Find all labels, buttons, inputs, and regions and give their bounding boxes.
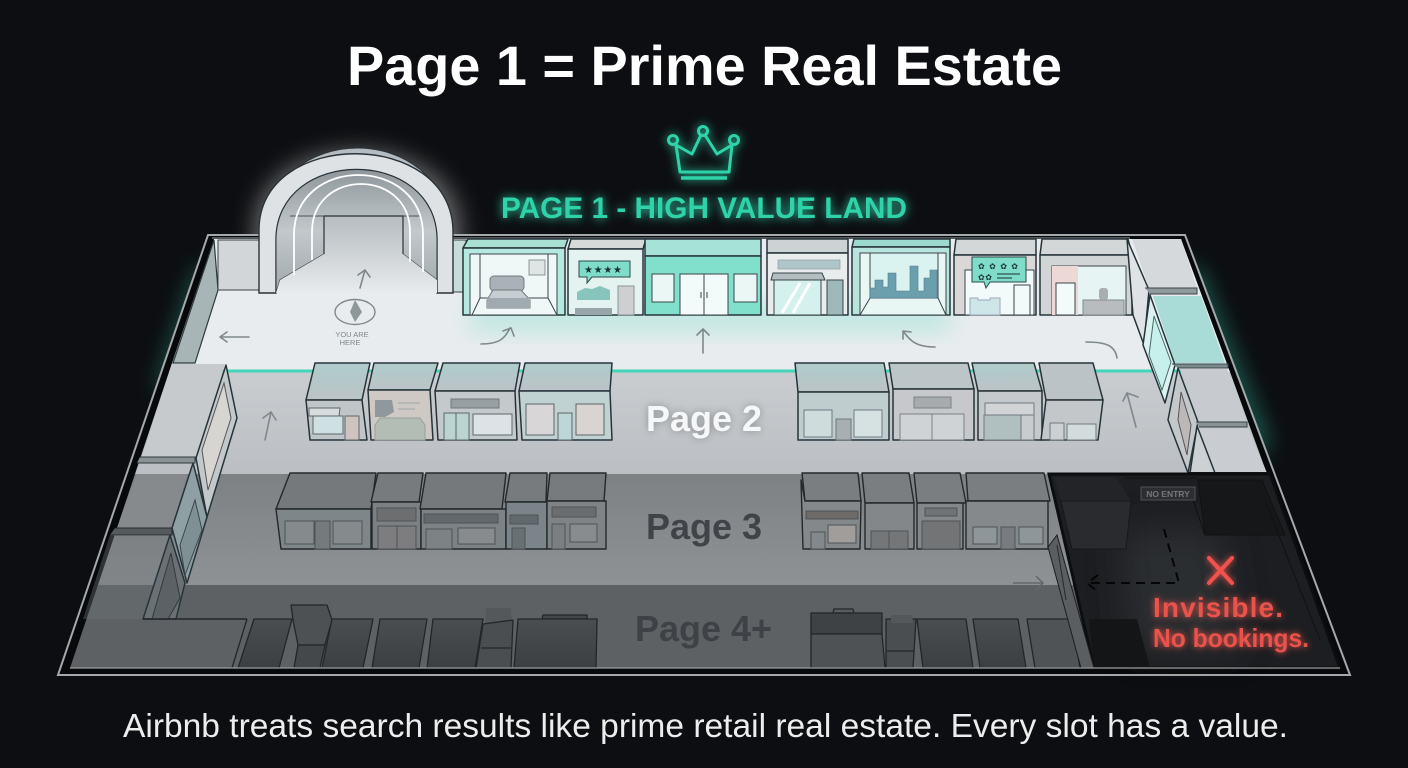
edge glow — [165, 270, 1262, 450]
floor plan — [58, 148, 1350, 675]
shop: p2 right 4 — [1039, 363, 1103, 440]
page 3 shops right — [801, 473, 1050, 549]
shop: p3 left 4 — [505, 473, 547, 549]
left side buildings — [83, 364, 247, 619]
icon: you are here marker: YOU ARE — [335, 330, 369, 339]
building: left 1 — [137, 364, 237, 517]
shop: p2 left 2 — [368, 363, 438, 440]
shop: p2 right 3 — [972, 363, 1042, 440]
shop: review counter: ✿✿ — [978, 273, 992, 282]
teal glow under page 1 shops — [470, 305, 950, 331]
shops: p4 right — [811, 609, 1080, 668]
shop: p3 left 1 — [276, 473, 376, 549]
arrow: dashed no-entry route — [1087, 529, 1179, 592]
shop: reviews: ★★★★ — [584, 265, 622, 276]
shop: p2 right 2 — [889, 363, 974, 440]
shop: p3 left 5 — [547, 473, 606, 549]
building: right 1 — [1127, 239, 1197, 345]
title: Page 1 = Prime Real Estate — [347, 34, 1062, 97]
page 2 shops right — [795, 363, 1103, 440]
arrow: into dark zone — [1013, 576, 1043, 590]
building: right 4 — [1190, 426, 1267, 473]
dark zone: invisible area — [1048, 474, 1340, 668]
shop: review counter — [954, 239, 1036, 315]
icon: you are here marker: HERE — [340, 338, 360, 347]
shop: reviews — [568, 239, 646, 315]
band: page 1 floor — [169, 239, 1230, 372]
shop: p3 right 1 — [801, 473, 861, 549]
icon: you are here marker — [335, 300, 375, 347]
bottom floor edge — [70, 667, 1340, 669]
shop: p2 left 4 — [519, 363, 612, 440]
shops: p4 left — [232, 605, 597, 668]
label: page 2: Page 2 — [646, 398, 762, 439]
callout: invisible no bookings: No bookings. — [1153, 623, 1309, 653]
building: left 3 — [83, 535, 247, 619]
page 2 shops left — [306, 363, 612, 440]
shop: city view — [852, 239, 950, 315]
shop: p3 right 3 — [914, 473, 966, 549]
shop: p2 left 3 — [435, 363, 520, 440]
sign: no entry — [1141, 487, 1195, 500]
tunnel entrance — [259, 148, 453, 293]
callout: invisible no bookings: Invisible. — [1153, 592, 1283, 623]
icon: crown — [668, 126, 738, 178]
right side buildings — [1127, 239, 1270, 474]
left wall: page 1 — [173, 238, 1130, 363]
side wall — [1048, 535, 1094, 668]
callout: invisible no bookings — [1153, 592, 1309, 653]
label: page 2: Page 2 — [646, 398, 762, 439]
shop: p2 right 1 — [795, 363, 889, 440]
shop: awning store — [767, 239, 848, 315]
tunnel glow — [255, 151, 460, 295]
shop: bedroom — [463, 239, 568, 315]
shop: lobby — [1040, 239, 1132, 315]
page 4 shops — [232, 605, 1080, 668]
shop: review counter: ✿✿✿✿ — [978, 262, 1018, 271]
shop: p3 right 4 — [966, 473, 1050, 549]
floor arrows: page 1 — [220, 270, 1117, 358]
shop: p3 left 2 — [371, 473, 423, 549]
page 3 shops left — [276, 473, 606, 549]
label: page 3: Page 3 — [646, 506, 762, 547]
icon: red cross — [1209, 558, 1232, 583]
outer frame — [58, 235, 1350, 675]
building: right 2 teal — [1143, 295, 1228, 403]
shop: teal storefront — [645, 239, 761, 315]
shop: p2 left 1 — [306, 363, 370, 440]
floor arrows: page 2 — [263, 393, 1138, 440]
shop: p3 right 2 — [862, 473, 914, 549]
sign: no entry: NO ENTRY — [1146, 489, 1190, 499]
page 1 shops — [463, 239, 1132, 315]
building: left 2 — [110, 463, 207, 583]
shop: p3 left 3 — [420, 473, 506, 549]
heading: page 1 high value land: PAGE 1 - HIGH VALUE LAND — [501, 192, 907, 225]
building: right 3 — [1168, 368, 1247, 473]
teal boundary line — [192, 370, 1192, 372]
dark boxes — [1054, 477, 1320, 668]
band: page 4 floor — [70, 585, 1094, 668]
caption: Airbnb treats search results like prime retail real estate. Every slot has a value. — [123, 707, 1288, 744]
band: page 3 floor — [98, 474, 1090, 585]
label: page 4+: Page 4+ — [635, 608, 772, 649]
band: page 2 floor — [135, 372, 1267, 474]
